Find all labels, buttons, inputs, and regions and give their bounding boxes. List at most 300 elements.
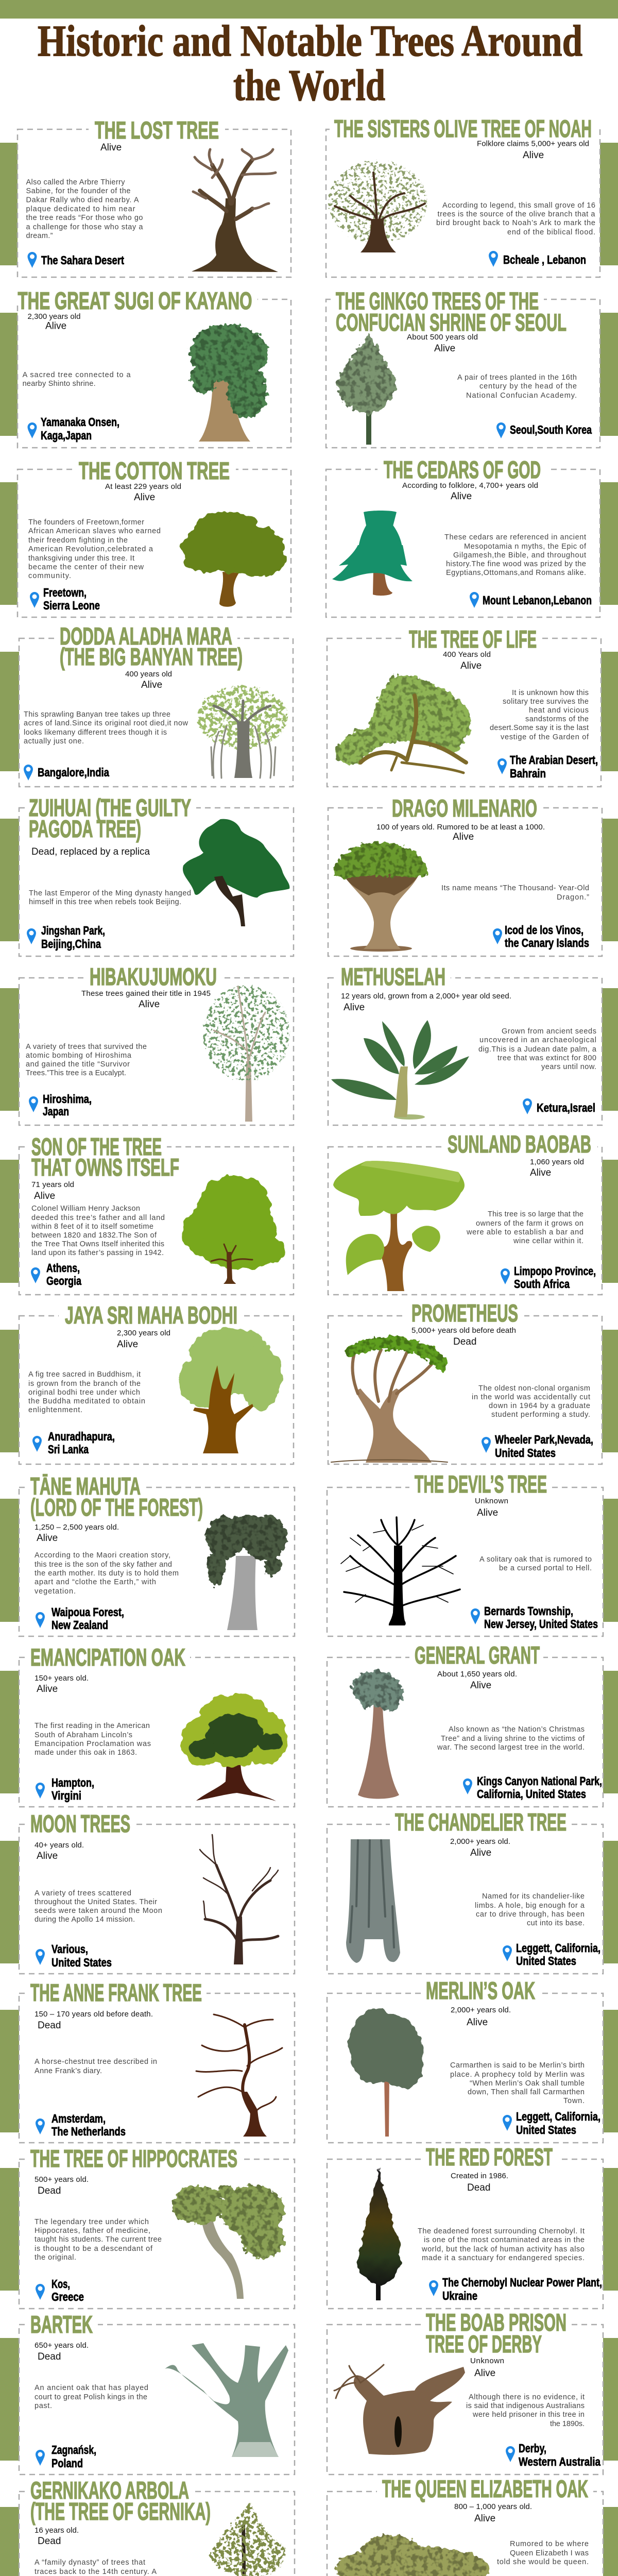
status: Alive bbox=[451, 491, 472, 502]
location bbox=[36, 1776, 94, 1802]
age: According to folklore, 4,700+ years old bbox=[402, 481, 538, 490]
description bbox=[441, 884, 589, 902]
location bbox=[497, 753, 598, 780]
status: Alive bbox=[37, 1533, 58, 1544]
heading bbox=[26, 2311, 98, 2338]
location: Bcheale , Lebanon bbox=[503, 253, 586, 266]
location bbox=[36, 2443, 96, 2470]
panel: Zuihuai (The Guilty Pagoda Tree) bbox=[19, 794, 294, 956]
heading: TREE OF DERBY bbox=[426, 2330, 542, 2358]
location: United States bbox=[516, 2123, 576, 2137]
icon: oak tree bbox=[181, 1694, 288, 1801]
description: Carmarthen is said to be Merlin’s birth bbox=[450, 2061, 585, 2070]
location: Jingshan Park, bbox=[41, 924, 105, 937]
age: Unknown bbox=[475, 1497, 508, 1505]
description: in the world was accidentally cut bbox=[472, 1393, 590, 1401]
description: South of Abraham Lincoln’s bbox=[35, 1731, 132, 1739]
heading bbox=[409, 1641, 543, 1669]
location: Georgia bbox=[46, 1274, 81, 1287]
heading: PAGODA TREE) bbox=[29, 815, 141, 842]
heading bbox=[59, 1301, 244, 1329]
heading: METHUSELAH bbox=[341, 963, 445, 990]
description: uncovered in an archaeological bbox=[479, 1036, 596, 1044]
description: the tree reads “For those who go bbox=[26, 214, 143, 222]
status: Alive bbox=[474, 2368, 495, 2379]
description: end of the biblical flood. bbox=[507, 228, 595, 236]
description bbox=[28, 518, 161, 580]
location: Bangalore,India bbox=[38, 766, 109, 779]
icon: chandelier tree bbox=[346, 1839, 400, 1963]
heading bbox=[26, 1810, 135, 1837]
location bbox=[36, 1605, 124, 1632]
heading: THE COTTON TREE bbox=[79, 457, 230, 484]
location: Derby, bbox=[519, 2442, 546, 2455]
description: Colonel William Henry Jackson bbox=[31, 1205, 140, 1213]
age: Folklore claims 5,000+ years old bbox=[477, 139, 589, 148]
panel: Merlin's Oak bbox=[327, 1977, 603, 2143]
icon: gernika oak bbox=[210, 2503, 286, 2576]
description bbox=[35, 1551, 179, 1596]
heading: SON OF THE TREE bbox=[31, 1133, 162, 1160]
description bbox=[35, 2558, 157, 2576]
panel: Methuselah bbox=[328, 963, 602, 1125]
heading bbox=[421, 2143, 558, 2171]
status: Alive bbox=[117, 1339, 138, 1350]
status: Alive bbox=[141, 680, 162, 690]
location: Kos, bbox=[52, 2277, 70, 2291]
status: Dead bbox=[38, 2536, 61, 2547]
description: Anne Frank’s diary. bbox=[35, 2067, 102, 2075]
location: Ukraine bbox=[442, 2289, 477, 2302]
description: is one of the most contaminated areas in the bbox=[424, 2236, 585, 2244]
description bbox=[466, 2393, 585, 2428]
description: A horse-chestnut tree described in bbox=[35, 2058, 157, 2066]
description bbox=[26, 1043, 147, 1077]
icon: pagoda tree bbox=[183, 819, 289, 926]
location: Sri Lanka bbox=[48, 1443, 89, 1456]
location: Hampton, bbox=[52, 1776, 94, 1789]
title: the World bbox=[233, 60, 385, 110]
status: Alive bbox=[34, 1191, 55, 1201]
description: Rumored to be where bbox=[510, 2540, 589, 2548]
status: Alive bbox=[139, 999, 160, 1010]
description: and gained the title “Survivor bbox=[26, 1060, 130, 1069]
panel: The Boab Prison Tree of Derby bbox=[327, 2309, 603, 2475]
heading: MOON TREES bbox=[30, 1810, 130, 1837]
location: The Arabian Desert, bbox=[510, 753, 598, 767]
description: original bodhi tree under which bbox=[28, 1388, 140, 1397]
location: Western Australia bbox=[519, 2455, 600, 2468]
description: dig.This is a Judean date palm, a bbox=[478, 1045, 597, 1054]
description: dream.” bbox=[26, 232, 53, 240]
status: Alive bbox=[100, 142, 122, 153]
description: An ancient oak that has played bbox=[35, 2384, 148, 2392]
panel: Sunland Baobab bbox=[328, 1130, 602, 1295]
description: American Revolution,celebrated a bbox=[28, 545, 153, 553]
heading bbox=[73, 457, 236, 484]
description: atomic bombing of Hiroshima bbox=[26, 1052, 132, 1060]
age: 1,250 – 2,500 years old. bbox=[35, 1523, 119, 1532]
heading: THE GREAT SUGI OF KAYANO bbox=[18, 287, 252, 314]
description: a challenge for those who stay a bbox=[26, 223, 143, 231]
location: Bahrain bbox=[510, 767, 546, 780]
status: Dead bbox=[467, 2182, 490, 2193]
panel: Jaya Sri Maha Bodhi bbox=[19, 1301, 294, 1464]
description bbox=[24, 710, 188, 745]
description: deeded this tree’s father and all land bbox=[31, 1214, 165, 1222]
heading bbox=[404, 625, 542, 653]
heading bbox=[55, 622, 243, 670]
description bbox=[497, 2540, 589, 2566]
heading bbox=[377, 456, 547, 483]
status: Alive bbox=[344, 1002, 365, 1013]
icon: eucalypt tree bbox=[204, 986, 290, 1122]
description: A fig tree sacred in Buddhism, it bbox=[28, 1370, 141, 1379]
icon: conifer tree bbox=[358, 2168, 401, 2300]
heading: GERNIKAKO ARBOLA bbox=[30, 2477, 189, 2504]
location bbox=[27, 924, 105, 951]
location bbox=[429, 2276, 602, 2302]
age: About 1,650 years old. bbox=[437, 1670, 517, 1679]
location: Icod de los Vinos, bbox=[505, 923, 583, 937]
status: Dead bbox=[38, 2185, 61, 2196]
description bbox=[35, 2058, 157, 2075]
status: Alive bbox=[467, 2017, 488, 2028]
heading bbox=[26, 1472, 203, 1521]
status: Dead bbox=[453, 1336, 476, 1347]
status: Alive bbox=[45, 320, 66, 332]
age: 40+ years old. bbox=[35, 1841, 84, 1850]
description: actually just one. bbox=[24, 737, 84, 745]
description bbox=[35, 2218, 162, 2262]
location bbox=[496, 422, 592, 438]
heading bbox=[26, 1133, 179, 1181]
status: Alive bbox=[434, 343, 455, 354]
location bbox=[523, 1098, 595, 1114]
description: A variety of trees scattered bbox=[35, 1889, 131, 1897]
description: vestige of the Garden of bbox=[501, 733, 589, 741]
description bbox=[472, 1384, 590, 1419]
location: Amsterdam, bbox=[52, 2112, 106, 2125]
icon: dead tree bbox=[192, 149, 278, 272]
status: Alive bbox=[477, 1507, 498, 1518]
description: car to drive through, has been bbox=[476, 1910, 585, 1919]
description: This tree is so large that the bbox=[488, 1210, 583, 1218]
icon: hippocrates tree bbox=[173, 2184, 284, 2299]
panel: Son of the Tree That Owns Itself bbox=[19, 1133, 294, 1295]
description: the 1890s. bbox=[550, 2420, 585, 2428]
age: 12 years old, grown from a 2,000+ year old seed. bbox=[341, 992, 511, 1001]
panel: Bartek bbox=[19, 2311, 295, 2475]
description bbox=[35, 2384, 148, 2410]
description: Its name means “The Thousand- Year-Old bbox=[441, 884, 589, 892]
description: seeds were taken around the Moon bbox=[35, 1907, 162, 1915]
description: National Confucian Academy. bbox=[466, 392, 577, 400]
description: Egyptians,Ottomans,and Romans alike. bbox=[446, 569, 586, 577]
heading: ZUIHUAI (THE GUILTY bbox=[29, 794, 191, 821]
icon: bare tree bbox=[200, 1835, 278, 1964]
location: Ketura,Israel bbox=[537, 1101, 595, 1114]
description: were able to establish a bar and bbox=[466, 1228, 583, 1236]
icon: boab tree bbox=[334, 2365, 465, 2455]
heading bbox=[25, 794, 196, 842]
description bbox=[35, 1889, 162, 1924]
location: Yamanaka Onsen, bbox=[41, 415, 119, 429]
heading: PROMETHEUS bbox=[411, 1299, 518, 1327]
heading bbox=[26, 2145, 243, 2172]
description: wine cellar within it. bbox=[513, 1237, 583, 1245]
location bbox=[489, 251, 586, 267]
description: Dragon.” bbox=[557, 893, 589, 902]
age: 150+ years old. bbox=[35, 1674, 89, 1683]
description: Trees.”This tree is a Eucalypt. bbox=[26, 1069, 126, 1077]
heading bbox=[421, 1977, 540, 2004]
location bbox=[32, 1430, 115, 1456]
age: 2,300 years old bbox=[28, 312, 80, 321]
icon: twisted tree bbox=[331, 1336, 448, 1463]
description: desert.Some say it is the last bbox=[490, 724, 589, 732]
heading: (LORD OF THE FOREST) bbox=[30, 1494, 203, 1521]
description: trees is the source of the olive branch that a bbox=[438, 210, 595, 218]
heading bbox=[26, 2477, 211, 2525]
description: war. The second largest tree in the world. bbox=[437, 1743, 585, 1752]
location: United States bbox=[495, 1446, 556, 1460]
location bbox=[28, 252, 124, 268]
panel: The Great Sugi of Kayano bbox=[15, 287, 291, 448]
icon: date palm bbox=[331, 1020, 469, 1120]
age: Unknown bbox=[470, 2357, 504, 2365]
description: during the Apollo 14 mission. bbox=[35, 1916, 135, 1924]
panel: The Lost Tree bbox=[18, 116, 291, 277]
description: years until now. bbox=[541, 1063, 596, 1071]
location: Zagnańsk, bbox=[52, 2443, 96, 2456]
description: court to great Polish kings in the bbox=[35, 2393, 147, 2401]
description bbox=[26, 178, 143, 240]
location bbox=[30, 586, 100, 612]
location bbox=[29, 1092, 92, 1118]
heading bbox=[26, 1643, 190, 1671]
description bbox=[457, 374, 577, 400]
age: 2,000+ years old. bbox=[451, 2006, 511, 2014]
description: enlightenment. bbox=[28, 1406, 82, 1414]
status: Alive bbox=[134, 492, 155, 503]
location: Kaga,Japan bbox=[41, 429, 92, 442]
icon: banyan tree bbox=[198, 686, 288, 778]
location: Japan bbox=[43, 1105, 69, 1118]
panel: Drago Milenario bbox=[328, 794, 602, 956]
heading bbox=[15, 287, 258, 314]
description: solitary tree survives the bbox=[503, 698, 589, 706]
heading bbox=[387, 794, 542, 822]
description: Tree” and a living shrine to the victims of bbox=[441, 1735, 585, 1743]
description: plaque dedicated to him near bbox=[26, 205, 135, 213]
panel: The Devil's Tree bbox=[327, 1470, 603, 1636]
description: place. A prophecy told by Merlin was bbox=[450, 2071, 585, 2079]
description: the earth mother. Its duty is to hold them bbox=[35, 1569, 179, 1578]
panel: The Cedars of God bbox=[326, 456, 600, 617]
location: Beijing,China bbox=[41, 937, 101, 951]
panel: The Red Forest bbox=[327, 2143, 603, 2309]
status: Dead, replaced by a replica bbox=[31, 846, 150, 857]
heading: THE ANNE FRANK TREE bbox=[30, 1979, 202, 2006]
description: told she would be queen. bbox=[497, 2558, 589, 2566]
location bbox=[471, 1604, 598, 1631]
status: Alive bbox=[474, 2513, 495, 2524]
location bbox=[463, 1774, 602, 1801]
panel: Dodda Aladha Mara bbox=[19, 622, 293, 787]
description: A “family dynasty” of trees that bbox=[35, 2558, 145, 2567]
status: Alive bbox=[453, 832, 474, 842]
description: community. bbox=[28, 572, 71, 580]
description: Gilgamesh,the Bible, and throughout bbox=[453, 551, 586, 560]
location: Waipoua Forest, bbox=[52, 1605, 124, 1619]
description: It is unknown how this bbox=[512, 689, 589, 697]
icon: cotton tree bbox=[181, 511, 286, 607]
description: made under this oak in 1863. bbox=[35, 1749, 137, 1757]
panel: The Sisters Olive Tree of Noah bbox=[326, 115, 600, 277]
age: 500+ years old. bbox=[35, 2175, 89, 2184]
location: Anuradhapura, bbox=[48, 1430, 115, 1443]
icon: sugi tree bbox=[190, 324, 268, 442]
description: Also known as “the Nation’s Christmas bbox=[449, 1725, 585, 1734]
location: Wheeler Park,Nevada, bbox=[495, 1433, 593, 1446]
description: acres of land.Since its original root died,it now bbox=[24, 719, 188, 727]
description bbox=[437, 1725, 585, 1752]
panel: Tane Mahuta (Lord of the Forest) bbox=[19, 1472, 295, 1636]
location: California, United States bbox=[477, 1787, 586, 1801]
location bbox=[503, 2110, 600, 2137]
status: Alive bbox=[523, 150, 544, 161]
age: About 500 years old bbox=[407, 333, 478, 342]
description bbox=[35, 1722, 151, 1757]
icon: sequoia tree bbox=[351, 1670, 403, 1799]
description: nearby Shinto shrine. bbox=[23, 380, 96, 388]
description bbox=[450, 2061, 585, 2105]
status: Dead bbox=[38, 2020, 61, 2031]
description bbox=[436, 201, 595, 236]
description: throughout the United States. Their bbox=[35, 1898, 157, 1906]
panel: Prometheus bbox=[328, 1299, 602, 1464]
description: Dakar Rally who died nearby. A bbox=[26, 196, 139, 204]
description: Although there is no evidence, it bbox=[469, 2393, 585, 2401]
heading bbox=[405, 1299, 524, 1327]
description: himself in this tree when rebels took Beijing. bbox=[29, 898, 181, 906]
heading: HIBAKUJUMOKU bbox=[90, 963, 217, 990]
description: The oldest non-clonal organism bbox=[478, 1384, 590, 1393]
age: These trees gained their title in 1945 bbox=[81, 989, 211, 998]
age: 650+ years old. bbox=[35, 2341, 89, 2350]
description: within 8 feet of it to itself sometime bbox=[31, 1223, 153, 1231]
location: United States bbox=[52, 1956, 112, 1969]
description: century by the head of the bbox=[479, 382, 577, 391]
description: between 1820 and 1832.The Son of bbox=[31, 1231, 157, 1240]
description: this tree is the son of the sky father and bbox=[35, 1561, 172, 1569]
description: past. bbox=[35, 2402, 52, 2410]
heading bbox=[26, 1979, 207, 2006]
icon: baobab tree bbox=[333, 1161, 465, 1291]
description bbox=[478, 1027, 597, 1071]
location bbox=[36, 2112, 126, 2138]
location bbox=[503, 1941, 600, 1968]
description: thanksgiving under this tree. It bbox=[28, 554, 134, 563]
panel: Moon Trees bbox=[19, 1810, 295, 1974]
age: 16 years old. bbox=[35, 2526, 79, 2535]
age: 150 – 170 years old before death. bbox=[35, 2010, 153, 2019]
location: Athens, bbox=[46, 1261, 80, 1275]
description: The last Emperor of the Ming dynasty hanged bbox=[29, 889, 191, 897]
status: Alive bbox=[460, 660, 482, 671]
description bbox=[479, 1555, 592, 1572]
age: 800 – 1,000 years old. bbox=[454, 2502, 532, 2511]
heading bbox=[89, 116, 225, 144]
description: Sabine, for the founder of the bbox=[26, 187, 131, 195]
description: be a cursed portal to Hell. bbox=[499, 1564, 592, 1572]
heading bbox=[421, 2309, 572, 2358]
age: 71 years old bbox=[31, 1180, 74, 1189]
description bbox=[23, 371, 131, 388]
icon: olive tree bbox=[329, 161, 428, 252]
heading bbox=[83, 963, 223, 990]
location: Greece bbox=[52, 2290, 84, 2303]
panel: The Queen Elizabeth Oak bbox=[327, 2475, 603, 2576]
status: Dead bbox=[38, 2351, 61, 2362]
description: became the center of their new bbox=[28, 563, 144, 571]
description: student performing a study. bbox=[491, 1411, 590, 1419]
description bbox=[28, 1370, 145, 1414]
status: Alive bbox=[470, 1848, 491, 1858]
icon: bare oak trunk bbox=[165, 2343, 288, 2457]
heading: THAT OWNS ITSELF bbox=[31, 1154, 179, 1181]
heading bbox=[409, 1470, 552, 1498]
heading: (THE BIG BANYAN TREE) bbox=[60, 643, 243, 670]
age: 2,300 years old bbox=[117, 1329, 170, 1337]
title bbox=[38, 16, 582, 110]
age: 400 Years old bbox=[443, 650, 491, 659]
description: Emancipation Proclamation was bbox=[35, 1740, 151, 1748]
description bbox=[31, 1205, 165, 1257]
description bbox=[475, 1892, 585, 1927]
heading: (THE TREE OF GERNIKA) bbox=[30, 2498, 211, 2525]
description: sandstorms of the bbox=[525, 715, 589, 723]
location bbox=[470, 592, 592, 608]
description: According to legend, this small grove of 16 bbox=[442, 201, 595, 210]
description: A sacred tree connected to a bbox=[23, 371, 131, 379]
location: New Zealand bbox=[52, 1618, 108, 1632]
panel: General Grant bbox=[327, 1641, 603, 1807]
description: Queen Elizabeth I was bbox=[510, 2549, 589, 2557]
age: Created in 1986. bbox=[451, 2172, 508, 2180]
description: The deadened forest surrounding Chernobyl. It bbox=[418, 2227, 585, 2235]
heading: BARTEK bbox=[30, 2311, 93, 2338]
description: African American slaves who earned bbox=[28, 527, 161, 535]
panel: The Cotton Tree bbox=[18, 457, 291, 617]
location bbox=[36, 1942, 112, 1969]
icon: hollow oak bbox=[335, 2535, 489, 2576]
description: tree that was extinct for 800 bbox=[497, 1054, 596, 1062]
description: the Tree That Owns Itself inherited this bbox=[31, 1240, 164, 1248]
location bbox=[36, 2277, 84, 2303]
heading: TĀNE MAHUTA bbox=[30, 1472, 141, 1500]
icon: bodhi tree bbox=[179, 1328, 282, 1453]
description: A pair of trees planted in the 16th bbox=[457, 374, 577, 382]
panel: The Tree of Life bbox=[327, 625, 601, 787]
panel: The Chandelier Tree bbox=[327, 1808, 603, 1974]
description: This sprawling Banyan tree takes up three bbox=[24, 710, 170, 719]
location: Various, bbox=[52, 1942, 88, 1956]
location: Sierra Leone bbox=[43, 599, 100, 612]
location: The Sahara Desert bbox=[41, 253, 124, 267]
description: traces back to the 14th century. A bbox=[35, 2568, 157, 2576]
